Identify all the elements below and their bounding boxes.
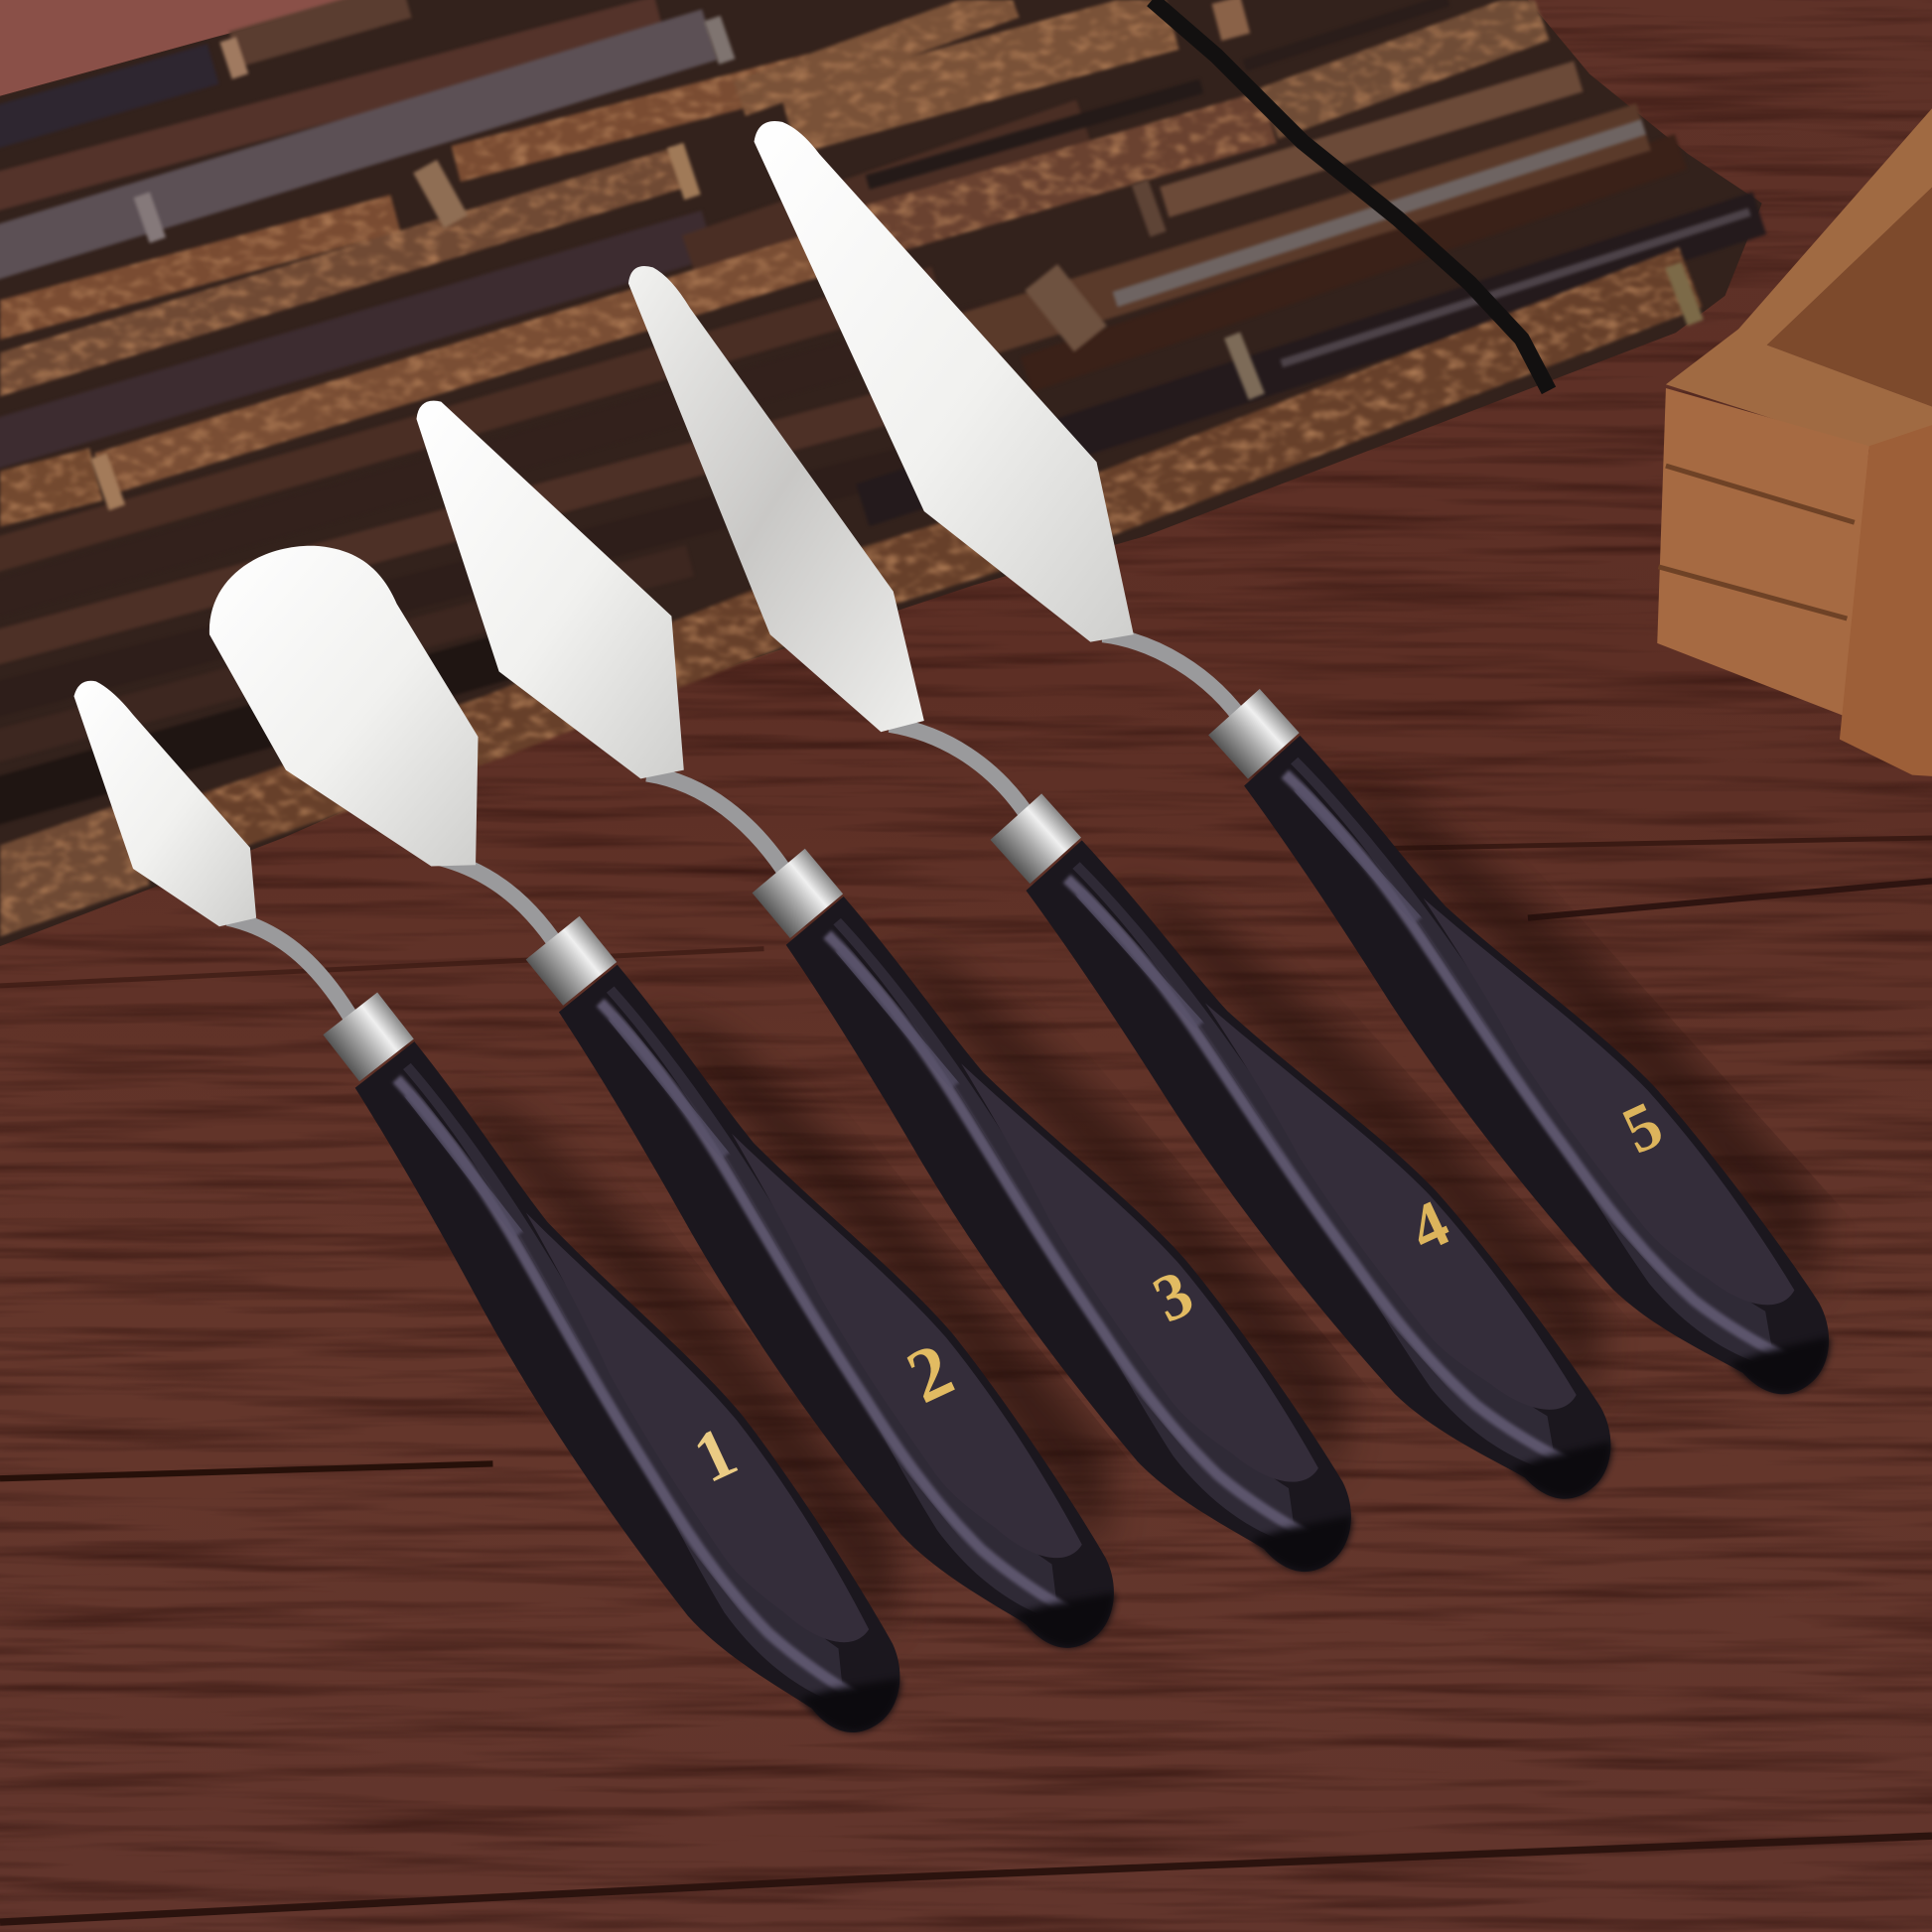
number 4: 4 xyxy=(1399,1186,1460,1267)
knife 3 neck xyxy=(647,773,794,888)
knife 2 blade xyxy=(209,546,479,866)
wooden box xyxy=(1657,108,1932,776)
knife 4 neck xyxy=(890,725,1033,823)
number 1: 1 xyxy=(682,1411,748,1498)
bamboo mat xyxy=(0,0,1762,946)
knife 4 handle xyxy=(938,775,1654,1544)
knife 2 neck xyxy=(434,857,567,961)
palette knife 1 xyxy=(73,681,946,1775)
knife 3 shadow xyxy=(869,885,1394,1487)
knife 1 neck xyxy=(228,918,359,1033)
number 3: 3 xyxy=(1143,1256,1203,1337)
number 2: 2 xyxy=(895,1326,965,1420)
knife 4 blade xyxy=(628,266,924,732)
palette knife 3 xyxy=(416,401,1395,1615)
knife 5 neck xyxy=(1103,634,1247,727)
knife 5 handle xyxy=(1157,671,1871,1440)
knife 1 blade xyxy=(73,681,256,926)
palette knife 5 xyxy=(755,121,1871,1440)
bamboo joints xyxy=(98,0,1696,507)
number 5: 5 xyxy=(1612,1087,1673,1169)
knife 2 shadow xyxy=(641,954,1159,1564)
palette knife 4 xyxy=(628,266,1654,1544)
palette knife 2 xyxy=(209,546,1159,1692)
knife 5 blade xyxy=(755,121,1134,642)
knife 2 handle xyxy=(472,899,1158,1692)
knife 1 handle xyxy=(268,976,943,1775)
knife 4 shadow xyxy=(1109,825,1651,1414)
knife 3 blade xyxy=(416,401,684,778)
knife 5 shadow xyxy=(1326,720,1868,1309)
knife 3 handle xyxy=(698,831,1395,1615)
knife 1 shadow xyxy=(438,1033,946,1649)
rope tie xyxy=(1152,0,1549,390)
